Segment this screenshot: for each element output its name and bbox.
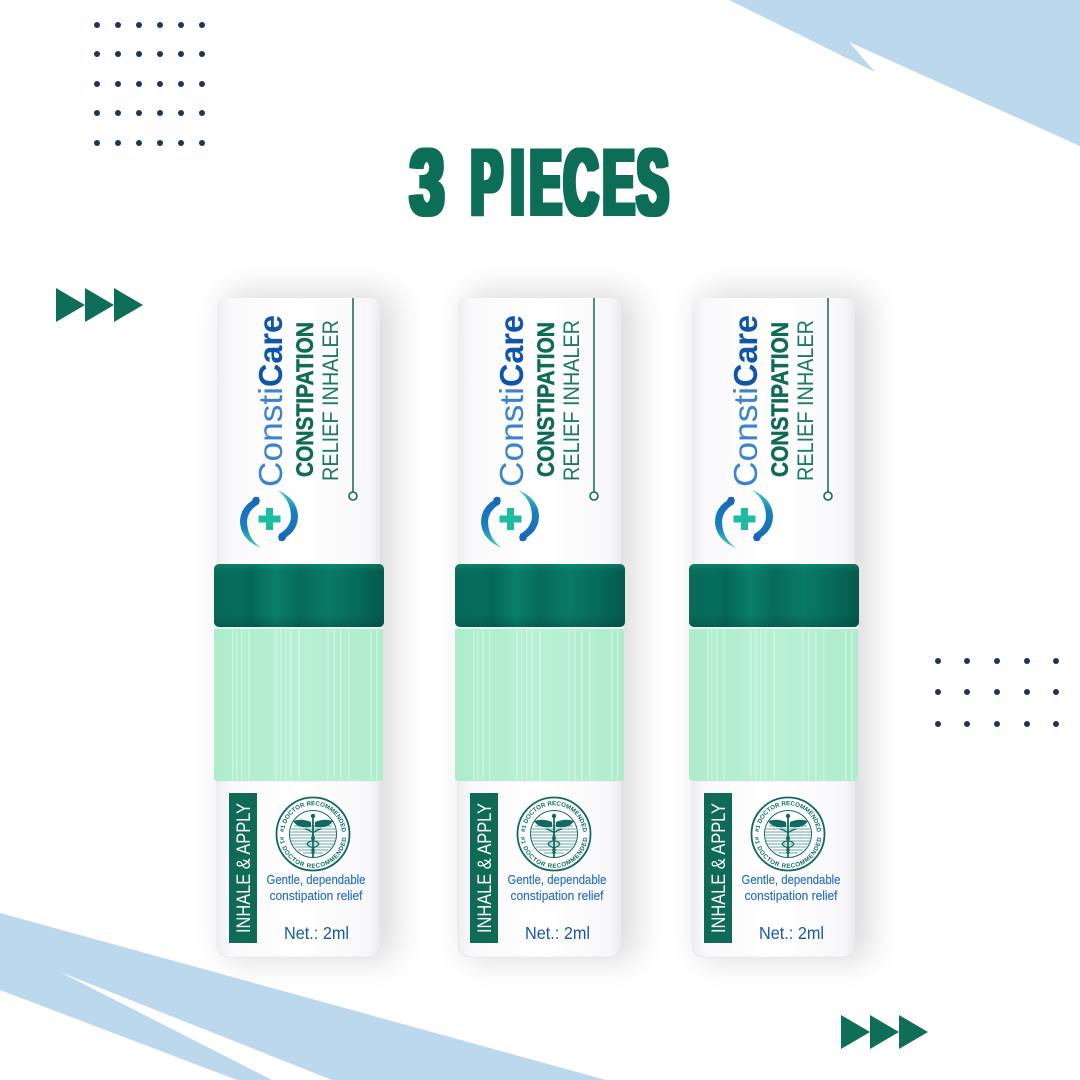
background shape: bottom left bbox=[0, 913, 606, 1080]
badge: doctor recommended bbox=[276, 796, 350, 872]
green label band: INHALE & APPLY bbox=[709, 803, 730, 933]
product name: relief inhaler: RELIEF INHALER bbox=[318, 320, 343, 481]
brand name bbox=[727, 315, 764, 487]
brand name bbox=[493, 315, 530, 487]
green label band: INHALE & APPLY bbox=[475, 803, 496, 933]
lower white body bbox=[217, 781, 380, 957]
label line with ring bbox=[824, 298, 832, 500]
badge: doctor recommended: #1 DOCTOR RECOMMENDED bbox=[754, 836, 822, 868]
title: PIECES bbox=[471, 130, 668, 235]
background shape: top right bbox=[729, 0, 1080, 146]
net volume: Net.: 2ml bbox=[525, 923, 590, 943]
tagline: Gentle, dependable bbox=[742, 872, 840, 887]
title: 3 bbox=[410, 129, 444, 235]
dark green collar bbox=[455, 564, 625, 627]
badge: doctor recommended: #1 DOCTOR RECOMMENDED bbox=[520, 836, 588, 868]
product: inhaler 2 bbox=[455, 281, 647, 971]
mint ribbed sleeve bbox=[455, 627, 624, 781]
product name: relief inhaler: RELIEF INHALER bbox=[559, 320, 584, 481]
tagline: Gentle, dependable bbox=[508, 872, 606, 887]
label line with ring bbox=[590, 298, 598, 500]
lower white body bbox=[692, 781, 855, 957]
green label band: INHALE & APPLY bbox=[234, 803, 255, 933]
dot grid: right bbox=[935, 658, 1059, 727]
badge: doctor recommended: #1 DOCTOR RECOMMENDED bbox=[280, 801, 346, 832]
net volume: Net.: 2ml bbox=[759, 923, 824, 943]
icon: logo bbox=[240, 490, 298, 548]
green label band bbox=[704, 793, 732, 943]
icon: logo bbox=[481, 490, 539, 548]
brand name: Care bbox=[493, 315, 530, 387]
brand name bbox=[252, 315, 289, 487]
brand name: Care bbox=[252, 315, 289, 387]
dark green collar bbox=[214, 564, 384, 627]
label line with ring bbox=[349, 298, 357, 500]
arrows: left bbox=[56, 288, 143, 322]
tagline: Gentle, dependable bbox=[266, 872, 366, 887]
product name: constipation: CONSTIPATION bbox=[767, 322, 794, 477]
dark green collar bbox=[689, 564, 859, 627]
product name: constipation: CONSTIPATION bbox=[533, 322, 560, 477]
mint ribbed sleeve bbox=[214, 627, 383, 781]
brand name: Consti bbox=[493, 387, 530, 487]
mint ribbed sleeve bbox=[689, 627, 858, 781]
product: inhaler 3 bbox=[689, 281, 881, 971]
net volume: Net.: 2ml bbox=[284, 923, 349, 943]
badge: doctor recommended: #1 DOCTOR RECOMMENDED bbox=[755, 801, 821, 832]
product: inhaler 1 bbox=[214, 281, 406, 971]
product name: constipation: CONSTIPATION bbox=[292, 322, 319, 477]
tagline line 2: constipation relief bbox=[270, 888, 363, 903]
green label band bbox=[470, 793, 498, 943]
brand name: Care bbox=[727, 315, 764, 387]
icon: logo bbox=[715, 490, 773, 548]
product name: relief inhaler: RELIEF INHALER bbox=[793, 320, 818, 481]
lower white body bbox=[458, 781, 621, 957]
green label band bbox=[229, 793, 257, 943]
badge: doctor recommended bbox=[750, 796, 826, 872]
badge: doctor recommended: #1 DOCTOR RECOMMENDED bbox=[280, 836, 346, 868]
brand name: Consti bbox=[727, 387, 764, 487]
tagline line 2: constipation relief bbox=[744, 888, 838, 903]
arrows: bottom right bbox=[841, 1015, 928, 1049]
badge: doctor recommended bbox=[516, 796, 592, 872]
dot grid: top left bbox=[94, 22, 205, 146]
brand name: Consti bbox=[252, 387, 289, 487]
tagline line 2: constipation relief bbox=[510, 888, 604, 903]
badge: doctor recommended: #1 DOCTOR RECOMMENDED bbox=[521, 801, 587, 832]
